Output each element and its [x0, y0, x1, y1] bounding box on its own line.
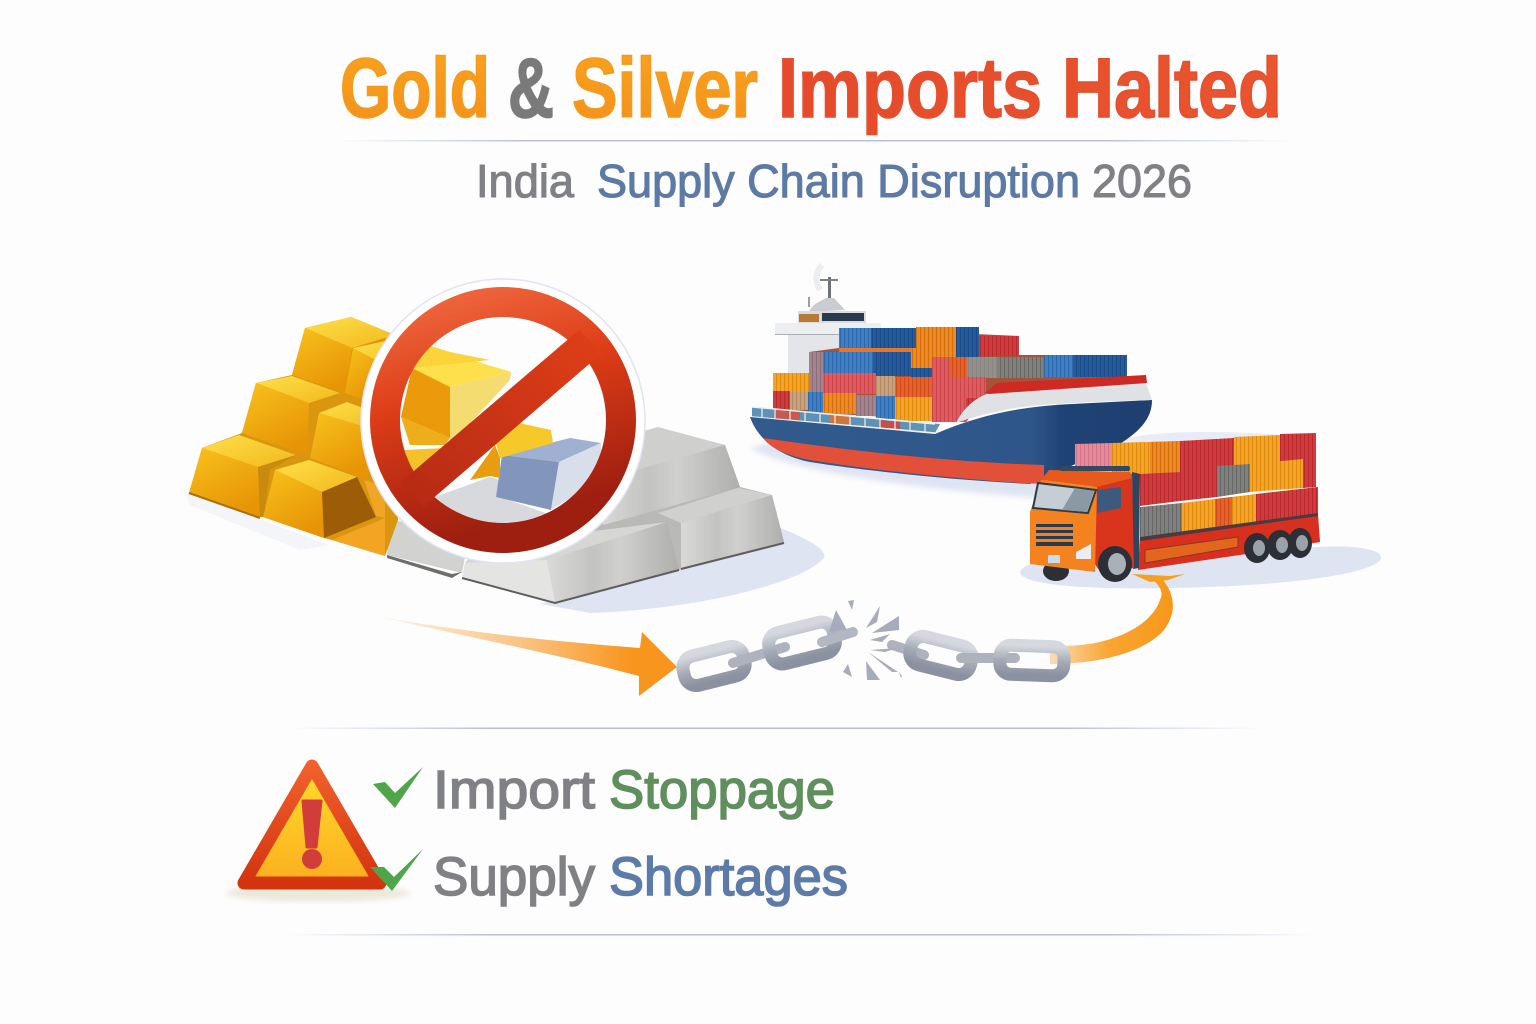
orange curve from chain to truck [1050, 578, 1173, 664]
chain link 1 [680, 644, 748, 688]
orange arrow into chain [370, 615, 677, 696]
check mark 2 [370, 849, 423, 891]
gold bar: bottom middle [263, 460, 376, 538]
silver bar: front centre [462, 522, 679, 603]
title: Gold [340, 41, 490, 135]
item text: Import: Import [433, 760, 595, 820]
chain broken stub right [892, 645, 924, 655]
title: Silver [572, 41, 758, 135]
broken chain [680, 619, 1064, 688]
truck side window [1097, 487, 1121, 513]
truck windscreen [1033, 483, 1096, 513]
silver bar: back right [600, 427, 740, 525]
gold bars [189, 317, 553, 556]
truck front-left wheel [1043, 561, 1069, 581]
chain shards [829, 600, 902, 680]
subtitle: Supply Chain Disruption [597, 155, 1080, 207]
item text: Supply: Supply [433, 847, 595, 907]
gold bar: bottom left [189, 435, 296, 518]
orange curve splash under truck [1132, 574, 1185, 582]
truck chassis [1138, 514, 1320, 570]
item text: Shortages: Shortages [609, 847, 848, 907]
gold bar: centre [310, 402, 395, 480]
ground shadows [185, 432, 1381, 613]
silver bar: front right [658, 488, 784, 569]
truck [1030, 433, 1320, 582]
ship superstructure [775, 265, 881, 376]
warning triangle icon [226, 766, 410, 902]
subtitle: 2026 [1092, 155, 1192, 207]
item text: Stoppage: Stoppage [609, 760, 835, 820]
truck cab column [1132, 472, 1140, 569]
gold bar right of sign [470, 423, 553, 480]
subtitle: India [476, 155, 574, 207]
truck grille [1036, 524, 1073, 546]
chain connector 2 [961, 653, 1015, 663]
ship red rail band [985, 375, 1147, 394]
ship deck railing [752, 407, 940, 433]
silver plate inside sign [435, 477, 560, 530]
gold bar: top back [292, 317, 395, 393]
gold bar: top second [345, 340, 420, 404]
title: & [508, 41, 554, 135]
silver bars [387, 427, 784, 603]
subtitle [476, 155, 1192, 207]
ship hull [750, 400, 1152, 484]
title: Imports Halted [778, 41, 1282, 135]
ship red boot stripe [763, 438, 1044, 484]
truck wheels [1098, 528, 1312, 582]
chain connector 1 [733, 647, 785, 663]
truck cab roof [1041, 470, 1132, 487]
ship containers [773, 327, 1127, 422]
cargo ship [750, 265, 1152, 484]
truck cab side [1092, 473, 1134, 573]
silver bar: left [387, 520, 470, 578]
chain link 3 [907, 634, 974, 677]
truck containers [1075, 433, 1318, 538]
check mark 1 [373, 767, 423, 808]
chain broken stub left [822, 632, 853, 642]
title [340, 41, 1282, 135]
ship white band [956, 383, 1152, 423]
prohibition sign [361, 279, 645, 563]
truck cab front [1030, 480, 1097, 572]
gold floor piece [332, 518, 385, 556]
silver stack backing [540, 432, 784, 602]
gold bar: mid left [242, 376, 340, 455]
chain link 2 [766, 619, 838, 667]
blue-tinted silver bar [496, 438, 601, 510]
chain link 4 [999, 645, 1064, 676]
gold bar inside sign [401, 346, 511, 476]
gold stack backing [189, 317, 398, 556]
